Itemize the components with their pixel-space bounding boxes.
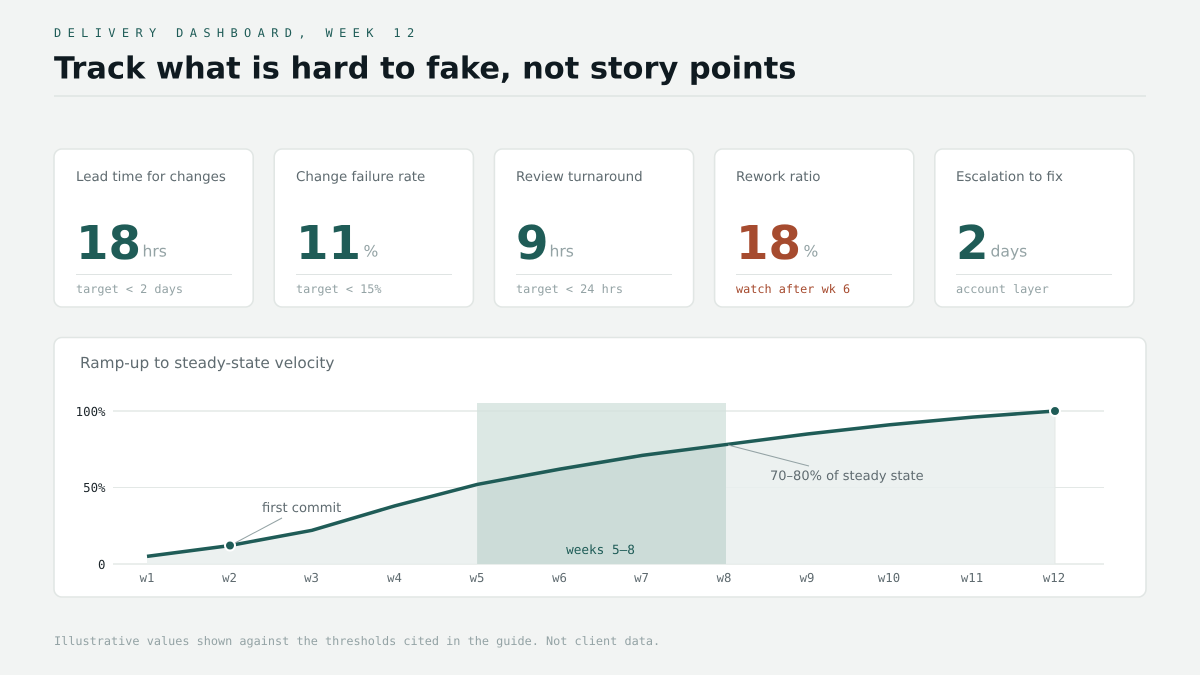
panel: lead time card: hrs [142,242,167,260]
panel: change failure rate card: Change failure rate [296,170,425,185]
x axis labels: w6 [552,571,567,585]
panel: rework ratio card [715,149,914,307]
callout: first commit: first commit [262,501,341,516]
panel: ramp-up chart [54,338,1146,597]
x axis labels: w8 [717,571,731,585]
velocity line [147,411,1055,556]
x axis labels [140,571,1065,585]
panel: review turnaround card: Review turnaround [516,170,643,185]
footnote: Illustrative values shown against the thresholds cited in the guide. Not client data. [54,634,660,648]
panel: lead time card: Lead time for changes [76,170,226,185]
panel: review turnaround card: target < 24 hrs [516,282,623,296]
x axis labels: w2 [222,571,237,585]
panel: change failure rate card: % [364,242,378,260]
panel: lead time card: target < 2 days [76,282,183,296]
panel: escalation card: account layer [956,282,1049,296]
panel: lead time card [54,149,253,307]
panel: rework ratio card: Rework ratio [736,170,820,185]
x axis labels: w9 [800,571,814,585]
highlighted band weeks 5-8 [477,403,726,564]
panel: escalation card: 2 [956,217,988,271]
panel: escalation card: days [990,242,1027,260]
area under curve [147,411,1055,564]
x axis labels: w5 [470,571,484,585]
panel: change failure rate card [274,149,473,307]
panel: escalation card [935,149,1134,307]
panel: lead time card: 18 [76,217,141,271]
callout: first commit [235,501,341,543]
x axis labels: w12 [1043,571,1065,585]
x axis labels: w4 [387,571,402,585]
x axis labels: w7 [634,571,649,585]
y axis labels: 0 [98,557,106,572]
eyebrow: DELIVERY DASHBOARD, WEEK 12 [54,26,421,40]
panel: change failure rate card: 11 [296,217,361,271]
x axis labels: w3 [304,571,319,585]
panel: rework ratio card: 18 [736,217,801,271]
y axis labels [76,404,106,572]
panel: rework ratio card: % [804,242,818,260]
panel: review turnaround card: hrs [550,242,574,260]
callout: steady state [728,445,924,484]
panel: review turnaround card [494,149,694,307]
panel: change failure rate card: target < 15% [296,282,382,296]
line chart [76,403,1104,585]
chart heading: Ramp-up to steady-state velocity [80,354,334,372]
marker: w12 [1050,406,1060,416]
marker: w2 [225,540,235,550]
y axis labels: 100% [76,404,106,419]
x axis labels: w1 [140,571,154,585]
y axis labels: 50% [83,480,106,495]
x axis labels: w10 [878,571,900,585]
panel: review turnaround card: 9 [516,217,548,271]
panel: escalation card: Escalation to fix [956,170,1063,185]
band label: weeks 5–8 [566,542,635,557]
panel: rework ratio card: watch after wk 6 [736,282,850,296]
x axis labels: w11 [961,571,983,585]
title: Track what is hard to fake, not story points [54,52,796,86]
callout: steady state: 70–80% of steady state [770,469,924,484]
